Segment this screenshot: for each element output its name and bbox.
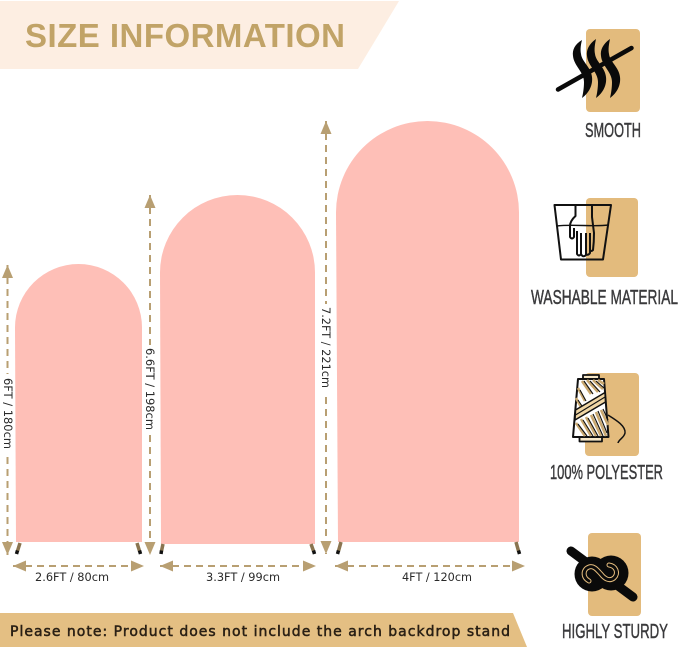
width arrow medium — [160, 565, 316, 567]
height label small: 6FT / 180cm — [1, 378, 15, 449]
small arch — [15, 264, 142, 554]
label: smooth: SMOOTH — [585, 120, 641, 142]
feature: washable — [531, 198, 678, 309]
width arrow large — [335, 565, 525, 567]
height arrow medium — [143, 195, 157, 555]
width label small: 2.6FT / 80cm — [35, 570, 109, 584]
height arrow large — [319, 121, 333, 554]
icon: hand in water — [554, 205, 611, 260]
large arch — [336, 121, 520, 554]
feature: sturdy — [562, 533, 668, 643]
height label medium: 6.6FT / 198cm — [143, 348, 157, 430]
title: SIZE INFORMATION — [25, 17, 345, 54]
height arrow small — [1, 265, 15, 555]
icon: smooth fibres — [558, 39, 632, 98]
width label medium: 3.3FT / 99cm — [206, 570, 280, 584]
feature: smooth — [558, 29, 641, 142]
medium arch — [160, 195, 315, 554]
icon: knot — [571, 551, 633, 597]
note text: Please note: Product does not include the arch backdrop stand — [10, 624, 510, 640]
width label large: 4FT / 120cm — [402, 570, 472, 584]
height label large: 7.2FT / 221cm — [319, 307, 333, 388]
feature: polyester — [550, 373, 663, 484]
title banner — [0, 1, 399, 69]
icon: thread spool — [573, 375, 625, 443]
note bar — [0, 613, 527, 647]
width arrow small — [13, 565, 144, 567]
